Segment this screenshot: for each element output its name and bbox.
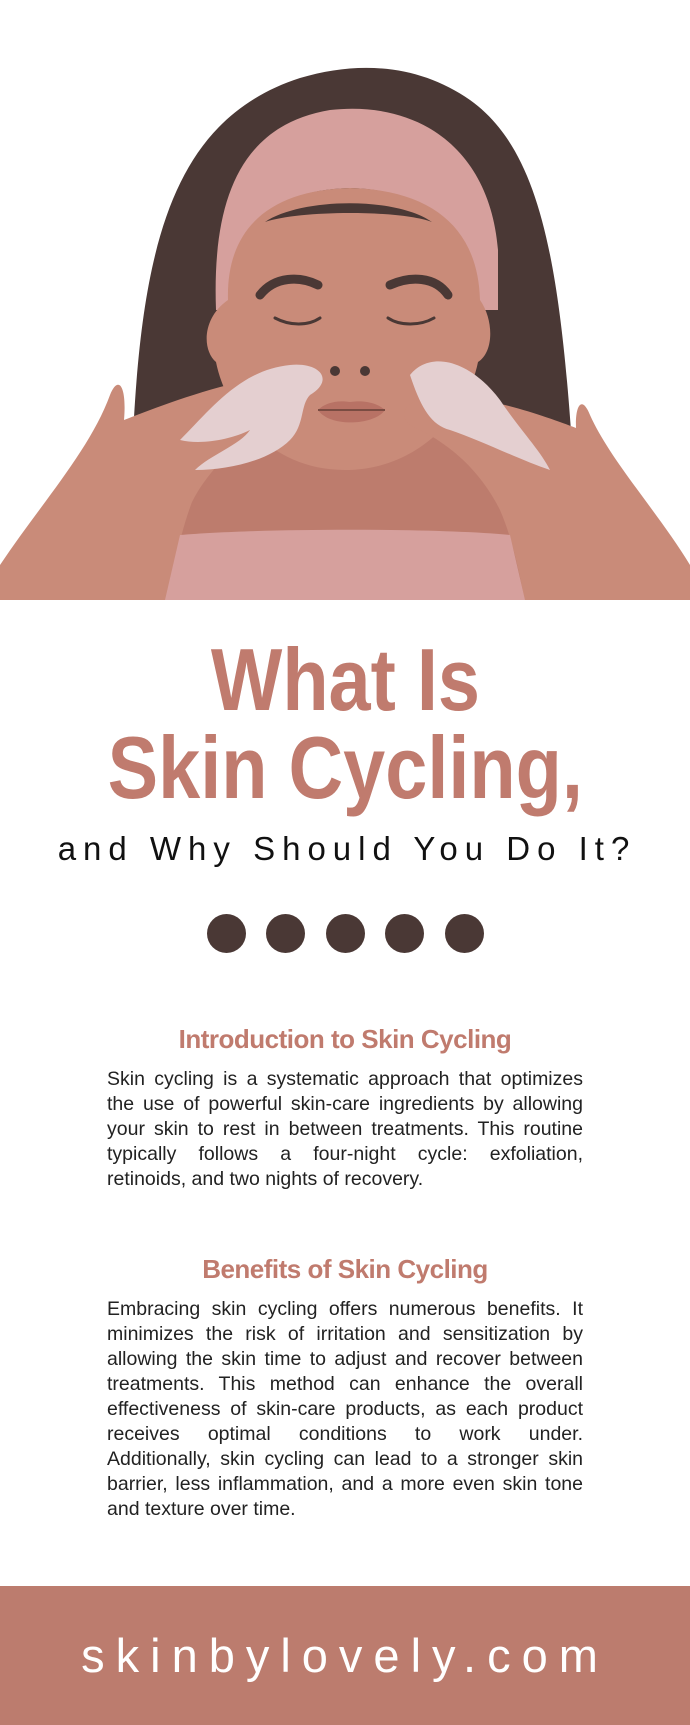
paragraph: benefits: receives optimal conditions to work under.: [107, 1423, 583, 1445]
paragraph: introduction: Skin cycling is a systematic approach that optimizes: [107, 1068, 583, 1090]
left hand with foam: [0, 365, 323, 600]
paragraph: benefits: barrier, less inflammation, and a more even skin tone: [107, 1473, 583, 1495]
paragraph: introduction: your skin to rest in between treatments. This routine: [107, 1118, 583, 1140]
tank top: [165, 530, 525, 600]
title: [107, 630, 583, 817]
paragraph: benefits: allowing the skin time to adjust and recover between: [107, 1348, 583, 1370]
paragraph: benefits: Embracing skin cycling offers numerous benefits. It: [107, 1298, 583, 1320]
paragraph: introduction: the use of powerful skin-care ingredients by allowing: [107, 1093, 583, 1115]
illustration: woman washing face: [0, 68, 690, 600]
paragraph: benefits: treatments. This method can enhance the overall: [107, 1373, 583, 1395]
eyebrows and eyes: [260, 279, 448, 324]
heading: benefits: Benefits of Skin Cycling: [202, 1254, 488, 1284]
paragraph: benefits: [107, 1298, 583, 1520]
footer text: website: skinbylovely.com: [81, 1629, 609, 1682]
footer band: [0, 1586, 690, 1725]
heading: introduction: Introduction to Skin Cycling: [179, 1024, 511, 1054]
subtitle: and Why Should You Do It?: [58, 830, 636, 867]
hair: [130, 68, 575, 510]
paragraph: introduction: typically follows a four-night cycle: exfoliation,: [107, 1143, 583, 1165]
neck and chest: [150, 430, 545, 600]
headband: [216, 109, 498, 310]
nose and lips: [318, 366, 385, 422]
title: Skin Cycling,: [107, 718, 583, 817]
paragraph: introduction: retinoids, and two nights of recovery.: [107, 1168, 423, 1190]
paragraph: benefits: Additionally, skin cycling can lead to a stronger skin: [107, 1448, 583, 1470]
face: [207, 188, 490, 470]
paragraph: benefits: minimizes the risk of irritation and sensitization by: [107, 1323, 583, 1345]
paragraph: benefits: and texture over time.: [107, 1498, 296, 1520]
dots: [207, 914, 484, 953]
paragraph: benefits: effectiveness of skin-care products, as each product: [107, 1398, 583, 1420]
right hand with foam: [404, 361, 690, 600]
title: What Is: [210, 630, 480, 729]
paragraph: introduction: [107, 1068, 583, 1190]
